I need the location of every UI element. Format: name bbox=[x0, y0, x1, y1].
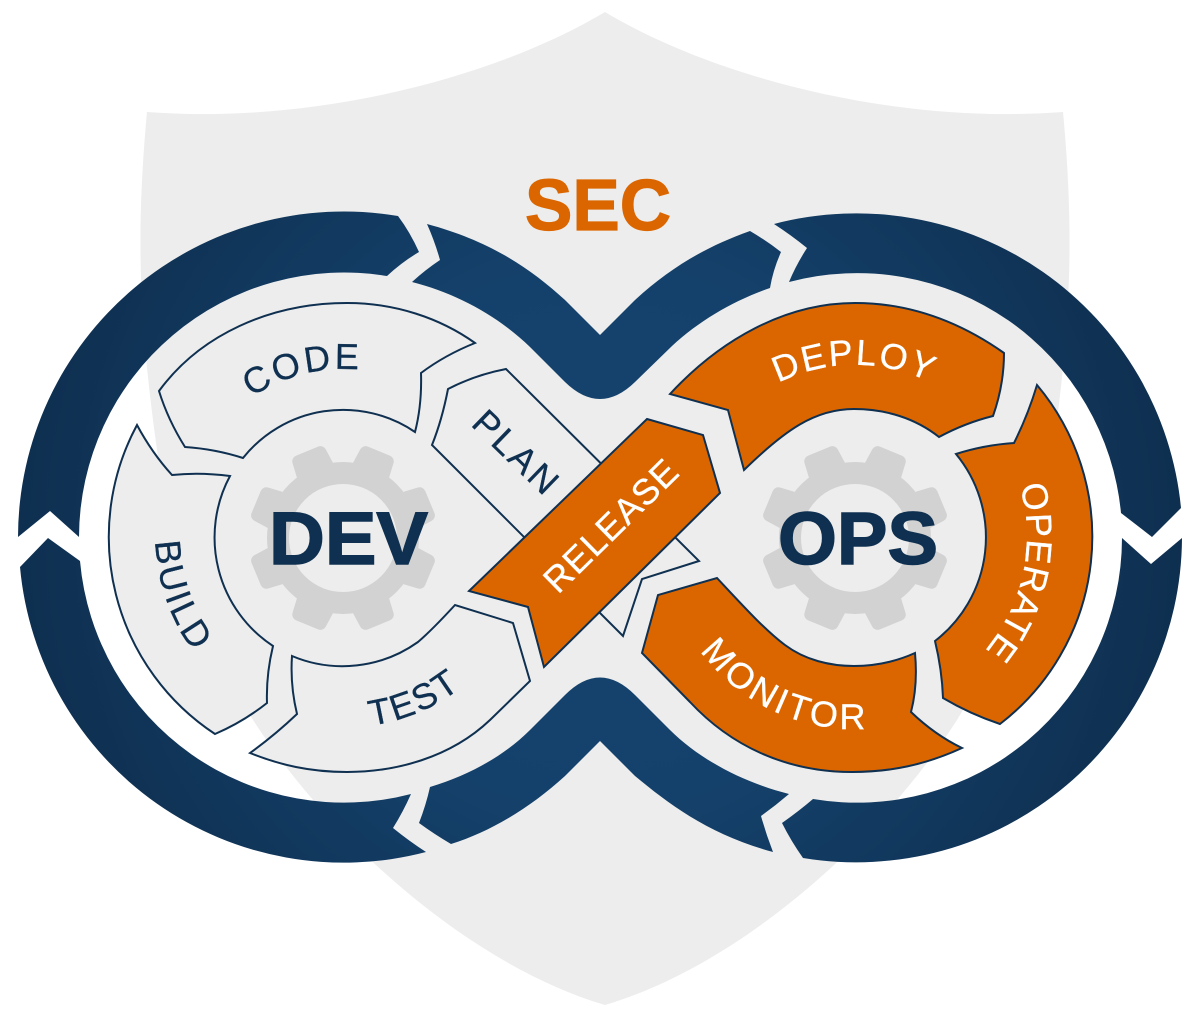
step: BUILD: BUILD bbox=[155, 542, 209, 646]
step: OPERATE bbox=[934, 383, 1094, 726]
step: PLAN: PLAN bbox=[464, 401, 569, 504]
step: DEPLOY: DEPLOY bbox=[771, 340, 938, 382]
step: TEST: TEST bbox=[366, 668, 454, 724]
step: PLAN bbox=[432, 369, 699, 636]
step: OPERATE: OPERATE bbox=[986, 484, 1052, 664]
gear: OPS bbox=[768, 451, 942, 625]
ring segment: bottom left bbox=[20, 538, 426, 863]
step: MONITOR bbox=[640, 576, 964, 773]
heading: SEC: SEC bbox=[525, 166, 671, 246]
ring segment: bottom right bbox=[782, 538, 1182, 862]
shield background bbox=[140, 12, 1070, 1005]
ring segment: top right bbox=[774, 213, 1181, 537]
step: RELEASE bbox=[469, 419, 720, 667]
infinity loop ring bbox=[18, 211, 1182, 863]
label: DEV: DEV bbox=[269, 497, 428, 580]
ring segment: top middle bbox=[412, 224, 781, 399]
gear: DEV bbox=[256, 451, 430, 625]
ring segment: bottom middle bbox=[419, 678, 789, 852]
step: RELEASE: RELEASE bbox=[535, 450, 687, 601]
step: BUILD bbox=[108, 423, 274, 736]
step: CODE: CODE bbox=[244, 344, 358, 392]
ring segment: top left bbox=[18, 211, 419, 537]
step: CODE bbox=[158, 302, 477, 460]
label: OPS: OPS bbox=[778, 497, 938, 580]
step: MONITOR: MONITOR bbox=[701, 636, 864, 730]
step: DEPLOY bbox=[668, 302, 1005, 472]
step: TEST bbox=[248, 604, 532, 773]
